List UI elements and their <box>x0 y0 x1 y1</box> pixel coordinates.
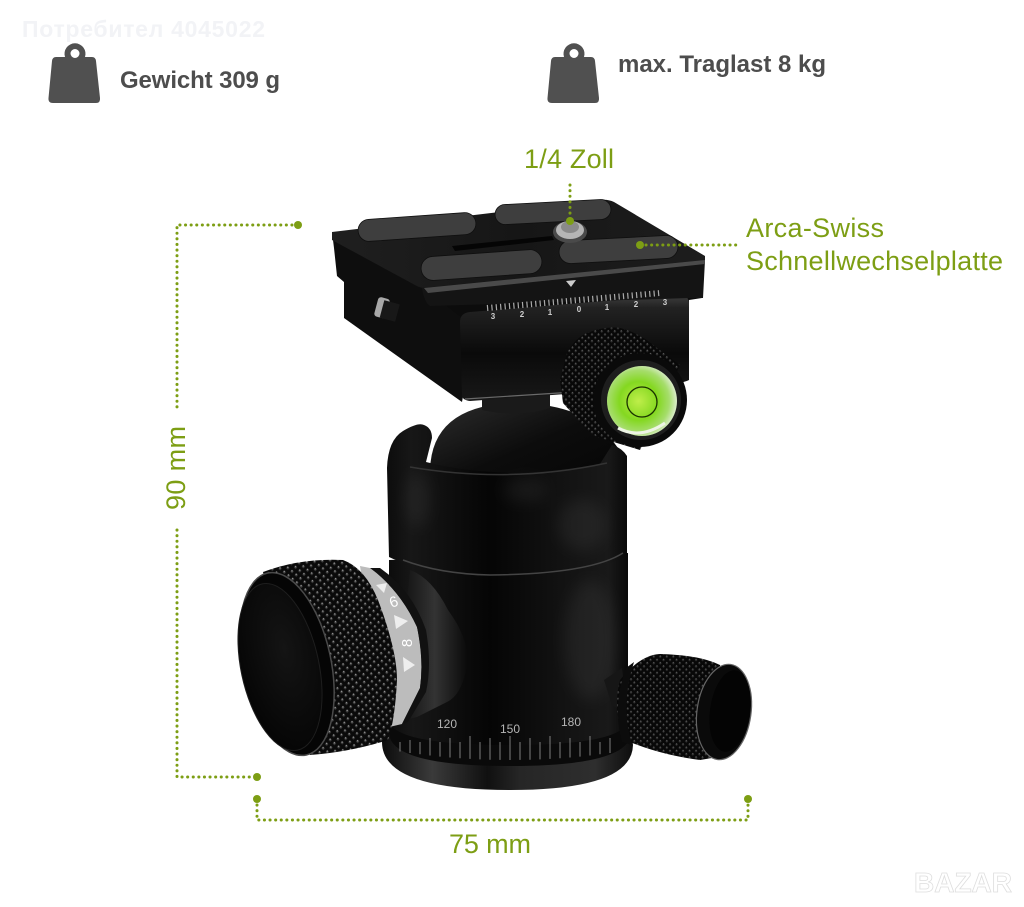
neck <box>482 392 550 414</box>
screw <box>553 221 587 243</box>
plate top <box>332 200 705 288</box>
right knob stem <box>604 668 628 715</box>
left clamp cylinder <box>395 570 467 722</box>
body rim highlight <box>410 463 607 475</box>
dial numbers: 180 <box>561 715 581 729</box>
dimension: height 90 mm <box>161 221 302 781</box>
right knob cap <box>704 668 756 754</box>
ball <box>430 403 627 490</box>
watermark: Bazar logo: BAZAR <box>914 867 1012 898</box>
clamp backing <box>426 262 704 340</box>
callout: 1/4 inch: 1/4 Zoll <box>524 144 614 174</box>
level circle <box>627 387 657 417</box>
product: ball head <box>224 199 757 790</box>
callout: 1/4 inch <box>524 144 614 225</box>
soft body reflections <box>406 472 616 700</box>
label: weight: Gewicht 309 g <box>120 67 280 94</box>
lever pin <box>374 297 390 319</box>
top knob body <box>560 328 680 450</box>
callout: Arca-Swiss plate <box>636 213 1003 276</box>
left knob collar scale <box>360 566 429 728</box>
dial numbers: 120 <box>437 717 457 731</box>
plate scale numbers: 1 <box>548 308 553 317</box>
base ring <box>382 725 633 790</box>
plate front edge <box>422 260 705 306</box>
dial numbers <box>437 715 581 736</box>
clamp left body <box>332 232 480 402</box>
plate scale numbers: 1 <box>605 303 610 312</box>
level vial <box>607 366 677 436</box>
callout: Arca-Swiss plate: Schnellwechselplatte <box>746 246 1003 276</box>
callout: Arca-Swiss plate: Arca-Swiss <box>746 213 884 243</box>
level bezel <box>593 353 687 447</box>
right knob rim <box>691 661 757 763</box>
clamp block <box>460 295 689 401</box>
watermark: user id: Потребител 4045022 <box>22 16 265 42</box>
left knob collar scale: 8 <box>399 639 416 647</box>
slot <box>452 236 554 251</box>
left knob cap <box>224 576 336 758</box>
dimension: width 75 mm: 75 mm <box>449 829 531 859</box>
plate scale numbers: 2 <box>634 300 639 309</box>
icon: weight right <box>547 43 599 103</box>
icon: weight left <box>48 43 100 103</box>
left knob knurl <box>263 560 397 755</box>
left knob collar scale: 6 <box>387 593 401 612</box>
plate scale numbers: 0 <box>577 305 582 314</box>
dial ticks <box>400 736 610 760</box>
dimension: height 90 mm: 90 mm <box>161 426 191 510</box>
dimension: width 75 mm <box>253 795 752 859</box>
body lower cylinder <box>389 553 628 745</box>
right knob knurl <box>617 654 730 760</box>
left knob cap rim <box>225 564 349 764</box>
body upper cylinder <box>387 424 627 575</box>
plate scale numbers: 3 <box>491 312 496 321</box>
plate scale ticks <box>487 293 660 308</box>
degree scale band <box>390 700 630 766</box>
right knob collar <box>618 662 634 745</box>
collar ridge <box>403 553 623 575</box>
plate scale numbers: 2 <box>520 310 525 319</box>
label: max load: max. Traglast 8 kg <box>618 51 826 78</box>
plate scale numbers <box>491 298 668 321</box>
dial numbers: 150 <box>500 722 520 736</box>
pads <box>357 199 679 281</box>
plate scale numbers: 3 <box>663 298 668 307</box>
marker <box>566 280 576 287</box>
